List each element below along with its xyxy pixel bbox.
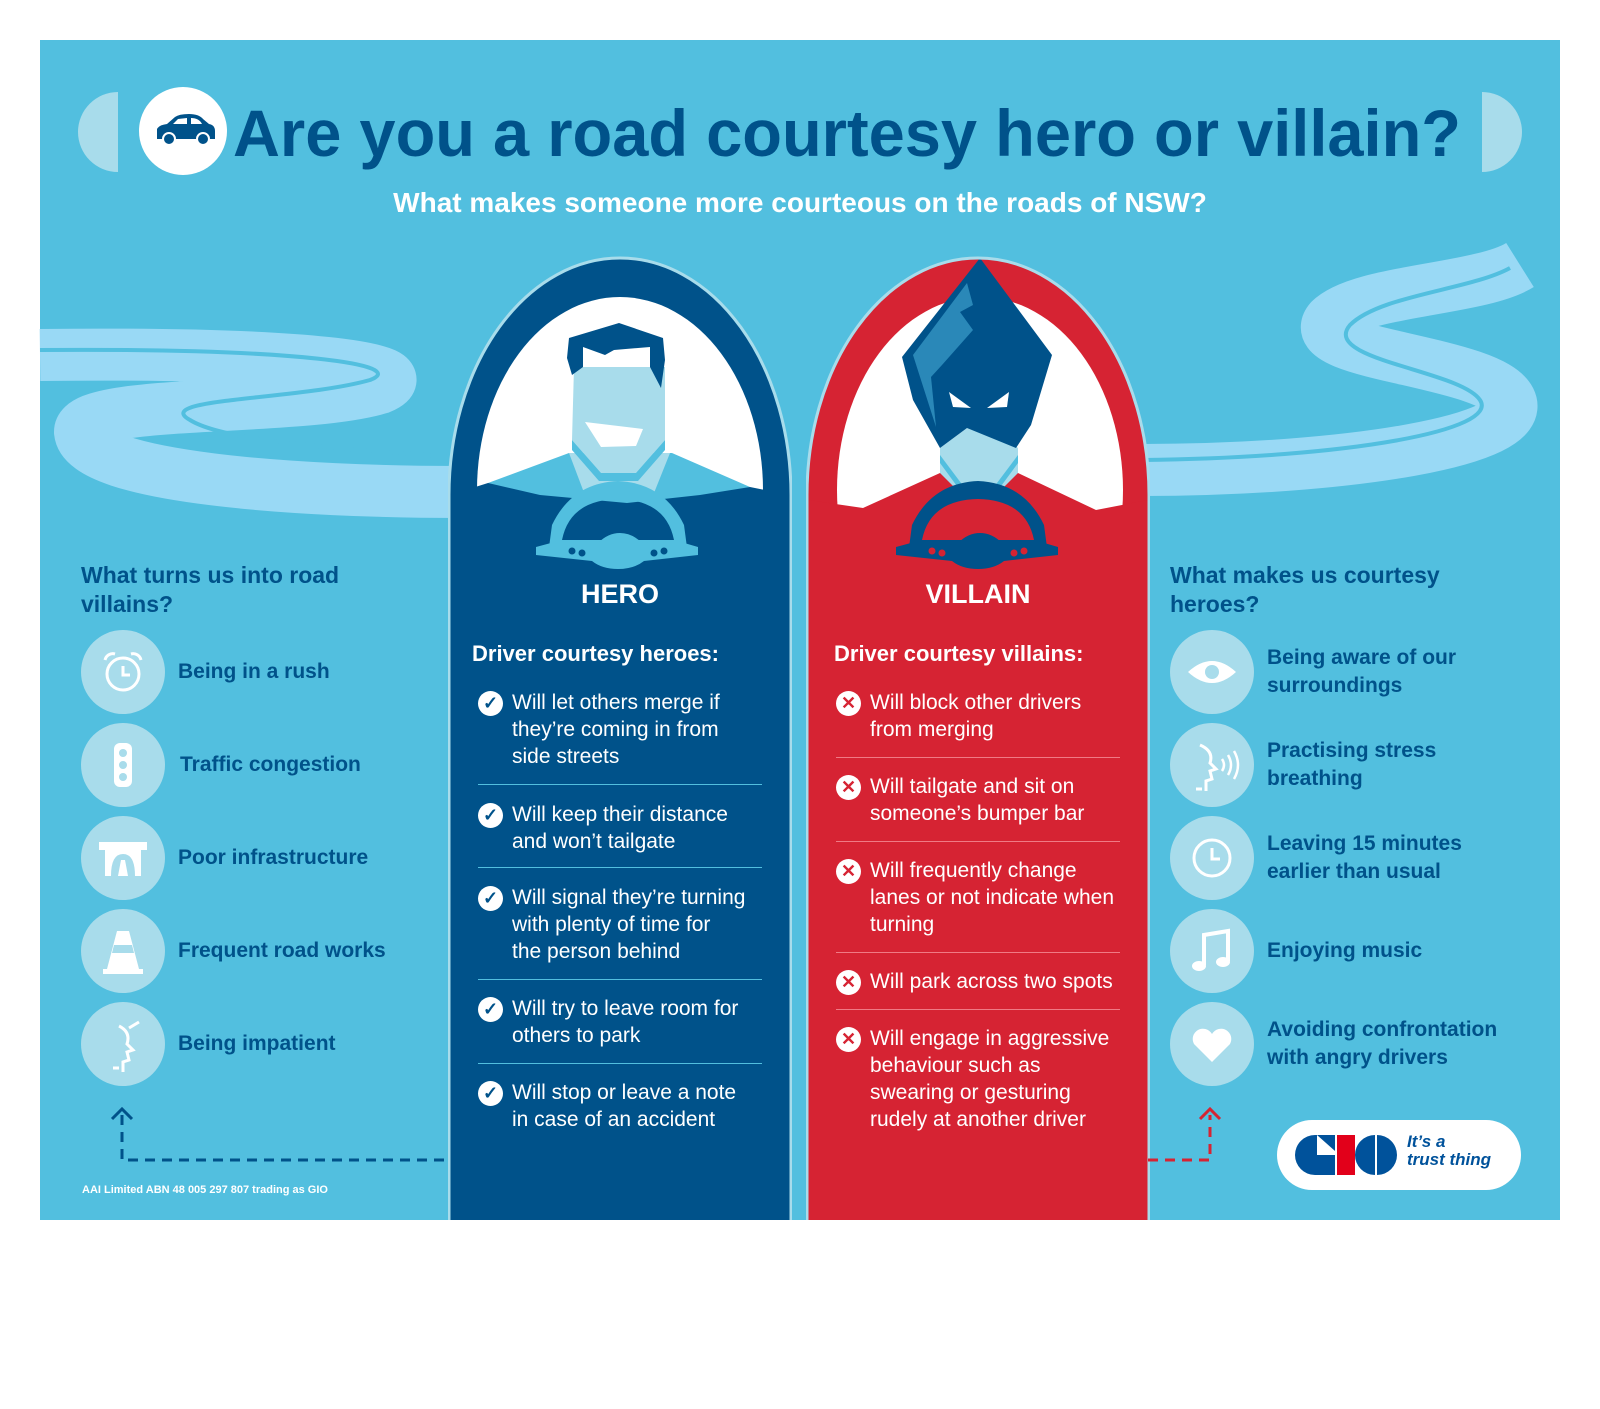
panel: hero [448,256,792,1220]
icon: traffic light: Traffic congestion [180,753,361,776]
title: Are you a road courtesy hero or villain? [233,96,1461,170]
icon: eye: surroundings [1267,674,1402,697]
villain list: from merging [870,718,994,741]
hero list: ✓ [483,1083,498,1103]
hero list: others to park [512,1024,640,1047]
hero list: in case of an accident [512,1108,715,1131]
icon: clock: earlier than usual [1267,860,1441,883]
icon: clock: Leaving 15 minutes [1267,832,1462,855]
arrow: left dashed [111,1107,444,1162]
left heading [81,562,339,617]
icon: traffic light [81,723,361,807]
icon: heart: with angry drivers [1267,1046,1448,1069]
villain list: ✕ [841,861,856,881]
right list [1170,630,1497,1086]
title block [78,87,1522,175]
icon: music [1170,909,1422,993]
icon: breathing: Practising stress [1267,739,1436,762]
icon: alarm clock: Being in a rush [178,660,330,683]
logo: It’s a [1407,1132,1445,1151]
villain list: lanes or not indicate when [870,886,1114,909]
icon: music: Enjoying music [1267,939,1422,962]
villain list: Will tailgate and sit on [870,775,1074,798]
icon: eye [1170,630,1456,714]
villain list [836,691,1120,1131]
icon: impatient face [81,1002,336,1086]
villain list: ✕ [841,972,856,992]
left heading: villains? [81,591,173,617]
hero list: ✓ [483,805,498,825]
hero list: ✓ [483,888,498,908]
hero list: they’re coming in from [512,718,719,741]
icon: eye: Being aware of our [1267,646,1456,669]
right heading: heroes? [1170,591,1259,617]
villain list: swearing or gesturing [870,1081,1071,1104]
villain list: ✕ [841,777,856,797]
hero list: ✓ [483,999,498,1019]
hero label: HERO [581,579,659,609]
icon: impatient face: Being impatient [178,1032,336,1055]
panel: villain [806,256,1150,1220]
left list [81,630,386,1086]
icon: heart: Avoiding confrontation [1267,1018,1497,1041]
icon: alarm clock [81,630,330,714]
right heading [1170,562,1440,617]
footer text: AAI Limited ABN 48 005 297 807 trading as GIO [82,1184,328,1196]
hero list: Will stop or leave a note [512,1081,736,1104]
logo: trust thing [1407,1150,1491,1169]
icon: road cone: Frequent road works [178,939,386,962]
villain list: someone’s bumper bar [870,802,1084,825]
icon: car [139,87,227,175]
hero list: Will keep their distance [512,803,728,826]
background panel [40,40,1560,1220]
right heading: What makes us courtesy [1170,562,1440,588]
icon: road cone [81,909,386,993]
villain list: Will frequently change [870,859,1077,882]
hero list: the person behind [512,940,680,963]
icon: breathing [1170,723,1436,807]
icon: tunnel [81,816,368,900]
villain heading: Driver courtesy villains: [834,641,1083,666]
subtitle: What makes someone more courteous on the roads of NSW? [393,187,1207,218]
hero list: Will let others merge if [512,691,720,714]
hero list: Will signal they’re turning [512,886,745,909]
icon: clock [1170,816,1462,900]
villain list: Will park across two spots [870,970,1113,993]
hero list: with plenty of time for [512,913,710,936]
hero list: ✓ [483,693,498,713]
villain list: Will engage in aggressive [870,1027,1109,1050]
villain list: behaviour such as [870,1054,1040,1077]
hero list: side streets [512,745,619,768]
hero list: and won’t tailgate [512,830,675,853]
villain list: Will block other drivers [870,691,1081,714]
hero list [478,691,762,1131]
villain label: VILLAIN [926,579,1030,609]
hero heading: Driver courtesy heroes: [472,641,719,666]
icon: breathing: breathing [1267,767,1363,790]
icon: heart [1170,1002,1497,1086]
icon: tunnel: Poor infrastructure [178,846,368,869]
hero list: Will try to leave room for [512,997,738,1020]
villain list: ✕ [841,1029,856,1049]
villain list: rudely at another driver [870,1108,1086,1131]
villain list: turning [870,913,934,936]
left heading: What turns us into road [81,562,339,588]
villain list: ✕ [841,693,856,713]
arrow: right dashed [1148,1107,1221,1162]
logo [1277,1120,1521,1190]
